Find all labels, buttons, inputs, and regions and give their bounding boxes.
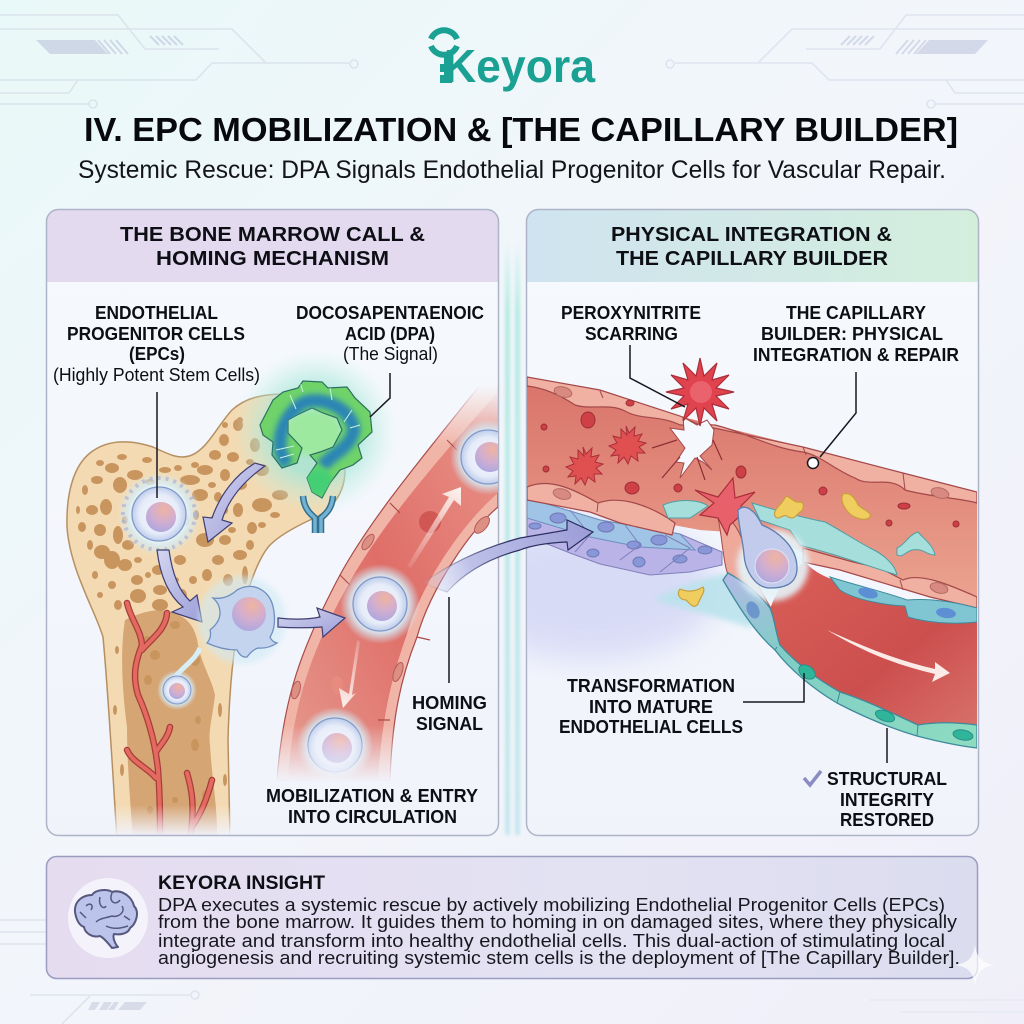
label: mobilization	[266, 785, 479, 827]
starburst: small upper	[609, 426, 646, 464]
marker: integration point	[808, 458, 818, 468]
heading: physical integration	[611, 224, 892, 270]
white crack	[652, 417, 722, 480]
starburst core	[690, 381, 712, 403]
insight body text: integrate and transform into healthy endothelial cells. This dual-action of stimulating local	[158, 931, 945, 951]
wall nuclei	[552, 385, 950, 595]
leader: DPA	[370, 373, 390, 417]
upper wall	[527, 377, 977, 503]
label: homing signal: HOMING	[412, 692, 487, 713]
label: capillary builder	[753, 302, 959, 365]
label: transformation	[559, 675, 743, 737]
cell separators	[597, 391, 905, 590]
leader: capillary builder	[820, 372, 856, 457]
marrow cavity	[122, 610, 217, 840]
leader: transformation	[743, 673, 804, 702]
cell: in vessel upper	[451, 420, 498, 494]
logo: Keyora: Keyora	[444, 40, 595, 92]
heading: Keyora insight: KEYORA INSIGHT	[158, 873, 325, 894]
red blood spots	[541, 400, 959, 527]
heading: physical integration: THE CAPILLARY BUILDER	[616, 248, 889, 270]
sparkle decoration	[955, 945, 995, 985]
panel header: right	[526, 210, 978, 282]
leader: structural integrity	[886, 728, 888, 763]
icon: brain	[68, 878, 148, 958]
center divider	[505, 240, 520, 835]
panel: Keyora insight	[46, 856, 978, 978]
receptor	[303, 496, 333, 533]
cell: integrating teardrop	[737, 507, 809, 601]
leader: EPCs	[156, 392, 158, 498]
label: transformation: TRANSFORMATION	[567, 675, 735, 696]
teal cell layer upper repaired	[830, 577, 977, 623]
label: peroxynitrite scarring: SCARRING	[585, 323, 678, 344]
white flow arrow	[827, 630, 950, 682]
arrow: EPC to activated cell	[157, 550, 202, 622]
starburst: small left	[566, 447, 603, 485]
icon: DPA signal molecule	[236, 358, 390, 533]
insight body text: from the bone marrow. It guides them to homing in on damaged sites, where they physically	[158, 912, 957, 932]
illustration: blood vessel	[276, 388, 498, 780]
panel header: left	[46, 210, 498, 282]
illustration: bone with marrow	[67, 394, 345, 840]
label: structural integrity restored: STRUCTURAL	[827, 768, 947, 789]
heading: bone marrow call	[120, 224, 425, 270]
starburst: peroxynitrite large	[666, 358, 734, 426]
panel: bone marrow call and homing mechanism	[46, 210, 526, 840]
label: EPCs	[53, 302, 260, 385]
icon: check mark	[804, 771, 821, 785]
title: IV. EPC MOBILIZATION & [THE CAPILLARY BUILDER]	[84, 111, 958, 148]
circuit decoration: top left	[0, 15, 358, 108]
panel: physical integration and capillary builder	[423, 210, 978, 836]
label: structural integrity restored: RESTORED	[840, 809, 934, 830]
label: EPCs: ENDOTHELIAL	[95, 302, 218, 323]
wall cell nuclei	[290, 514, 492, 700]
trabecular pores	[76, 417, 288, 814]
cell: entering circulation	[340, 564, 420, 644]
starburst: lower tear	[695, 478, 755, 535]
white flow arrow: down	[339, 640, 360, 708]
label: EPCs: (EPCs)	[129, 343, 185, 364]
label: capillary builder: BUILDER: PHYSICAL	[761, 323, 943, 344]
main damaged band	[527, 377, 977, 600]
circuit decoration: bottom	[0, 920, 1024, 1024]
arrow: homing into right panel	[423, 520, 593, 592]
tear column	[718, 518, 771, 608]
arrow: activated cell to vessel	[278, 608, 345, 637]
subtitle: Systemic Rescue: DPA Signals Endothelial Progenitor Cells for Vascular Repair.	[78, 156, 946, 184]
yellow blobs	[678, 494, 870, 606]
red vessels in bone	[127, 603, 212, 840]
cell: EPC in bone marrow	[117, 472, 201, 556]
label: structural integrity restored: INTEGRITY	[840, 789, 935, 810]
teal extravasation	[653, 573, 753, 628]
illustration: damaged and repaired vessel	[527, 358, 977, 749]
circuit decoration: top right	[666, 15, 1024, 108]
label: EPCs: (Highly Potent Stem Cells)	[53, 365, 260, 385]
progenitor cell layer	[527, 498, 722, 575]
leader: peroxynitrite	[630, 345, 685, 407]
heading: bone marrow call: HOMING MECHANISM	[156, 248, 389, 270]
repaired wall	[723, 573, 977, 748]
heading: bone marrow call: THE BONE MARROW CALL &	[120, 224, 425, 246]
white flow arrow: up	[407, 487, 461, 568]
label: EPCs: PROGENITOR CELLS	[67, 323, 245, 344]
label: peroxynitrite scarring	[561, 302, 701, 344]
arrow: signal to EPC	[203, 463, 265, 542]
label: homing signal: SIGNAL	[416, 713, 483, 734]
label: peroxynitrite scarring: PEROXYNITRITE	[561, 302, 701, 323]
label: homing signal	[412, 692, 487, 734]
insight body text	[158, 895, 960, 968]
label: mobilization: INTO CIRCULATION	[288, 806, 457, 827]
label: structural integrity restored	[827, 768, 947, 830]
cell: activated amoeboid	[198, 576, 286, 664]
leader: homing signal	[448, 597, 450, 683]
label: capillary builder: INTEGRATION & REPAIR	[753, 344, 959, 365]
cell: in vessel lower	[298, 708, 372, 776]
cell: small budding	[157, 648, 200, 710]
label: transformation: INTO MATURE	[589, 696, 713, 717]
insight body text: angiogenesis and recruiting systemic stem cells is the deployment of [The Capillary Builder].	[158, 948, 960, 968]
label: DPA: (The Signal)	[343, 344, 438, 364]
repaired lumen	[768, 562, 977, 728]
lower wall left	[527, 483, 675, 535]
label: transformation: ENDOTHELIAL CELLS	[559, 716, 743, 737]
label: DPA: DOCOSAPENTAENOIC	[296, 302, 484, 323]
lower wall right	[803, 548, 977, 608]
label: mobilization: MOBILIZATION & ENTRY	[266, 785, 479, 806]
label: capillary builder: THE CAPILLARY	[786, 302, 927, 323]
label: DPA	[296, 302, 484, 364]
insight body text: DPA executes a systemic rescue by actively mobilizing Endothelial Progenitor Cells (EPCs)	[158, 895, 945, 915]
teal patches	[663, 501, 935, 575]
label: DPA: ACID (DPA)	[345, 323, 435, 344]
heading: physical integration: PHYSICAL INTEGRATION &	[611, 224, 892, 246]
